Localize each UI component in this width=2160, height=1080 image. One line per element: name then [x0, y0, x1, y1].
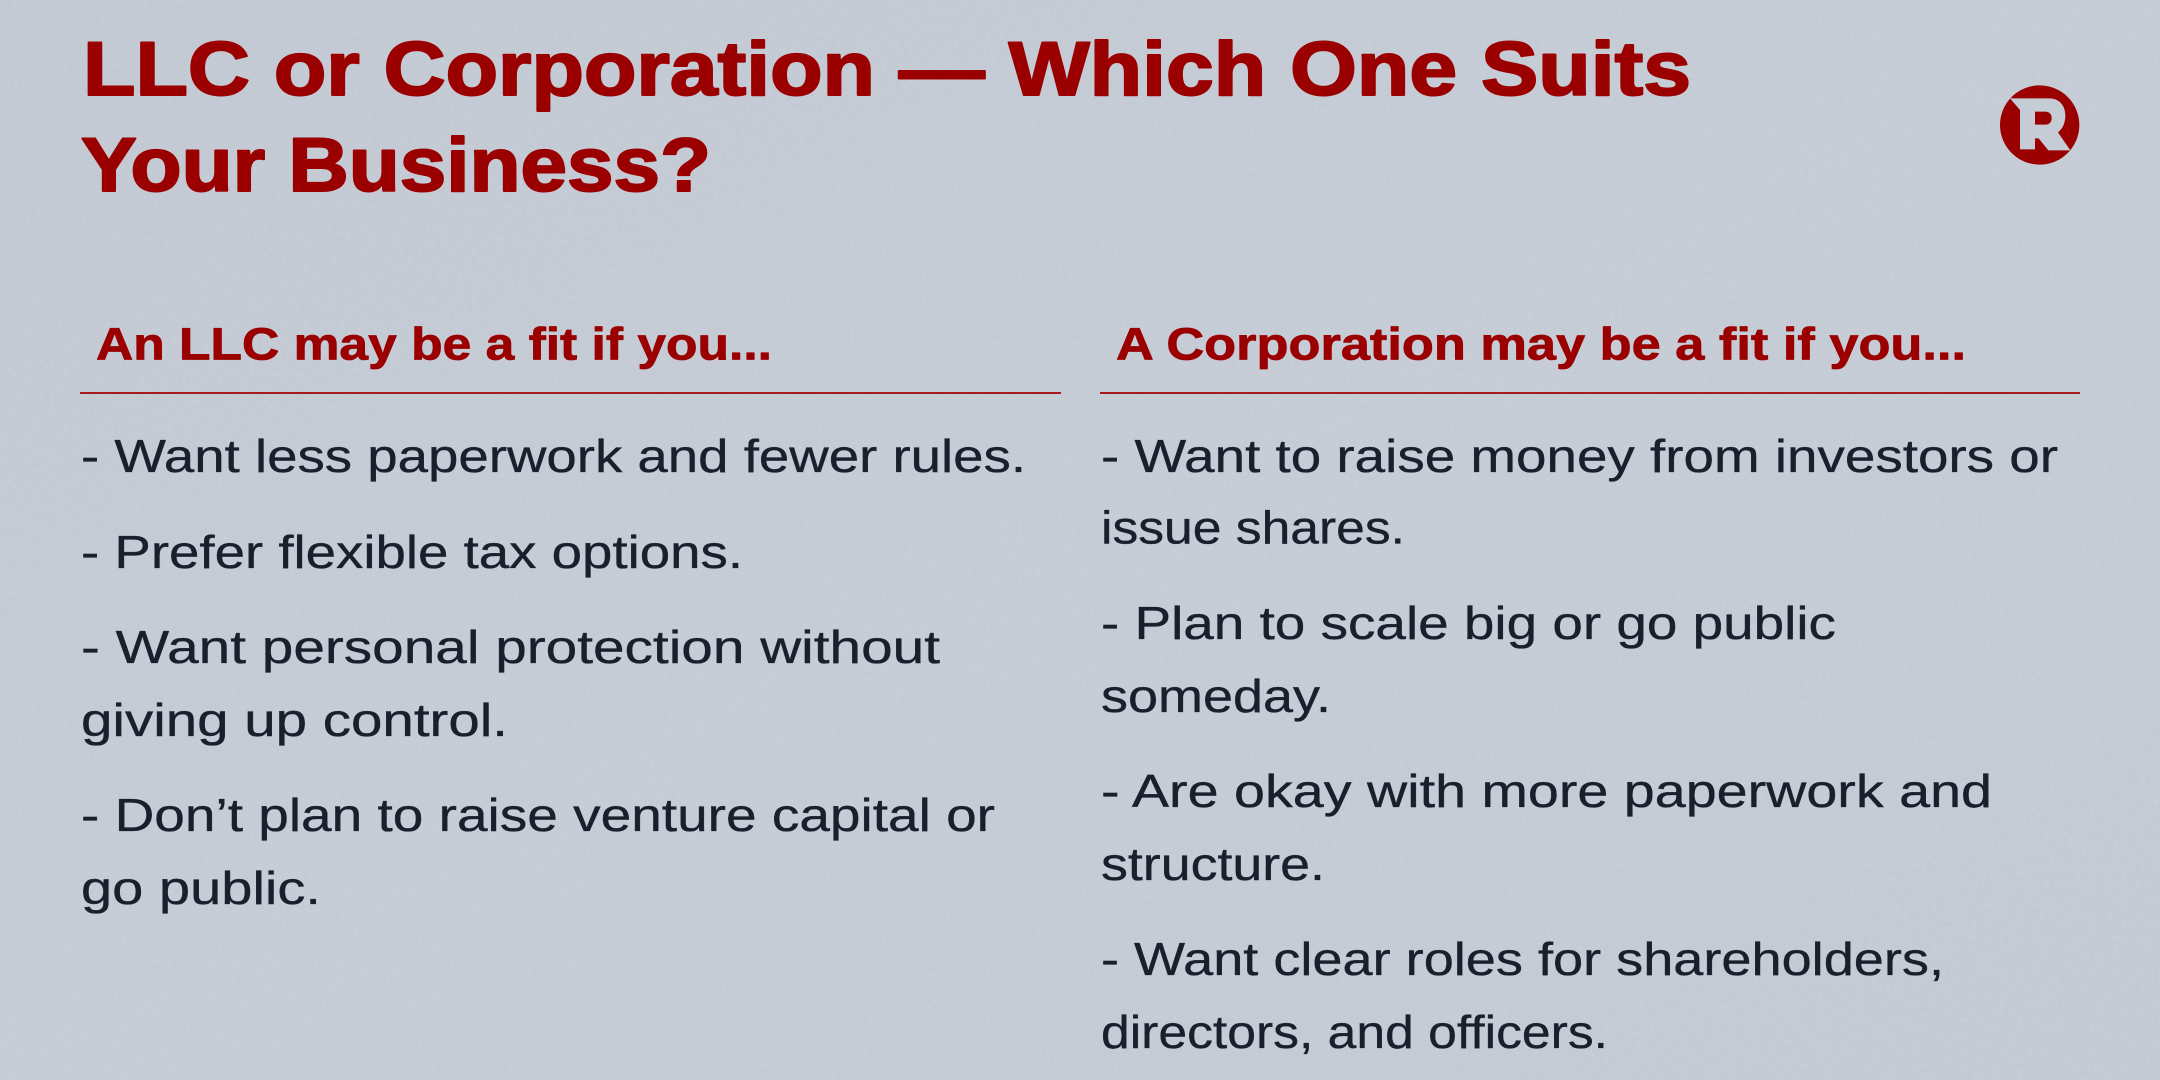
title — [81, 27, 1691, 208]
LLC list item 4 — [81, 789, 995, 914]
Corporation list item 3 — [1101, 765, 1992, 890]
LLC list item 1: - Want less paperwork and fewer rules. — [81, 430, 1026, 482]
Corporation list item 4 — [1101, 933, 1944, 1058]
LLC list item 3: - Want personal protection without — [81, 621, 940, 673]
Corporation list item 2: someday. — [1101, 670, 1331, 722]
Corporation list item 1: issue shares. — [1101, 502, 1405, 554]
LLC list item 2: - Prefer flexible tax options. — [81, 526, 743, 578]
Corporation list item 3: structure. — [1101, 838, 1325, 890]
LLC list item 4: go public. — [81, 862, 321, 914]
Corporation list item 4: directors, and officers. — [1101, 1006, 1608, 1058]
heading: Corporation: A Corporation may be a fit if you... — [1116, 318, 1966, 370]
Corporation list item 4: - Want clear roles for shareholders, — [1101, 933, 1944, 985]
heading: LLC: An LLC may be a fit if you... — [96, 318, 772, 370]
LLC list item 3 — [81, 621, 940, 746]
Corporation list item 2 — [1101, 597, 1836, 722]
Corporation list item 3: - Are okay with more paperwork and — [1101, 765, 1992, 817]
LLC list item 4: - Don’t plan to raise venture capital or — [81, 789, 995, 841]
LLC list item 3: giving up control. — [81, 694, 508, 746]
Corporation list item 2: - Plan to scale big or go public — [1101, 597, 1836, 649]
LLC divider — [80, 392, 1061, 394]
Corporation list item 1 — [1101, 430, 2058, 554]
Corporation list item 1: - Want to raise money from investors or — [1101, 430, 2058, 482]
title: LLC or Corporation — Which One Suits — [83, 27, 1691, 112]
icon: R logo — [2000, 85, 2079, 165]
panel: Corporation column — [1100, 318, 2080, 1058]
title: Your Business? — [81, 123, 711, 208]
Corporation divider — [1100, 392, 2080, 394]
panel: LLC column — [80, 318, 1061, 914]
